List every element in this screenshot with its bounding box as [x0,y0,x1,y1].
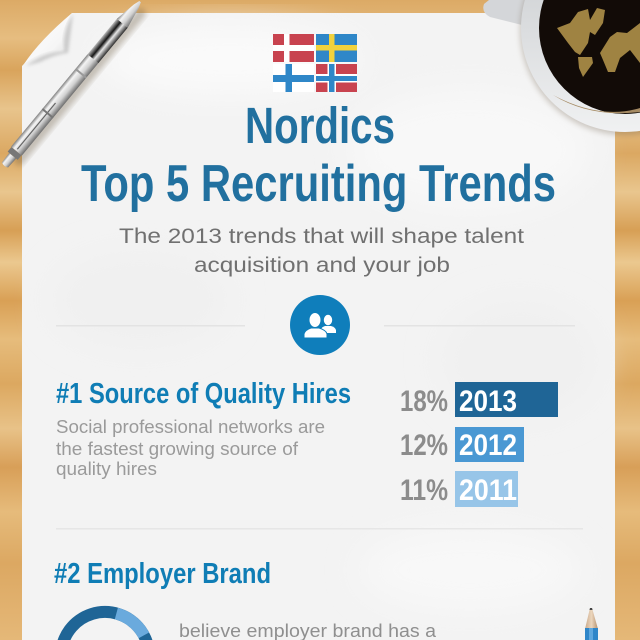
donut chart [58,606,152,640]
flag: Norway [316,64,357,92]
heading: #2 Employer Brand [54,558,271,590]
icon: pen [0,0,150,174]
section 1: source of quality hires [56,378,558,507]
cup handle [483,0,526,26]
bar chart: 11% [400,474,448,507]
icon: coffee cup with world map [483,0,640,135]
bar chart: 18% [400,385,448,418]
title: Nordics [245,97,395,154]
bar chart: 2011 [459,474,517,507]
description text: Social professional networks are [56,417,325,437]
flags of the Nordic countries [273,34,357,92]
description text [56,417,325,479]
cup rim [521,0,640,132]
subtitle: acquisition and your job [194,254,450,277]
flag: Denmark [273,34,314,62]
icon: pencil [585,608,598,640]
subtitle: The 2013 trends that will shape talent [119,225,524,248]
bar chart [400,382,558,507]
description text: quality hires [56,459,157,479]
section divider lines [56,325,575,326]
title [81,97,556,213]
subtitle [119,225,524,277]
heading: #1 Source of Quality Hires [56,378,351,410]
bar chart: 2012 [459,429,517,462]
bar chart: 2013 [459,385,517,418]
bar chart: 12% [400,429,448,462]
world map [557,8,640,77]
flag: Sweden [316,34,357,62]
folded paper corner [24,13,73,66]
coffee [539,0,640,114]
description text: the fastest growing source of [56,439,299,459]
section 2: employer brand [54,558,437,640]
flag: Finland [273,64,314,92]
icon: people in blue circle [290,295,350,355]
